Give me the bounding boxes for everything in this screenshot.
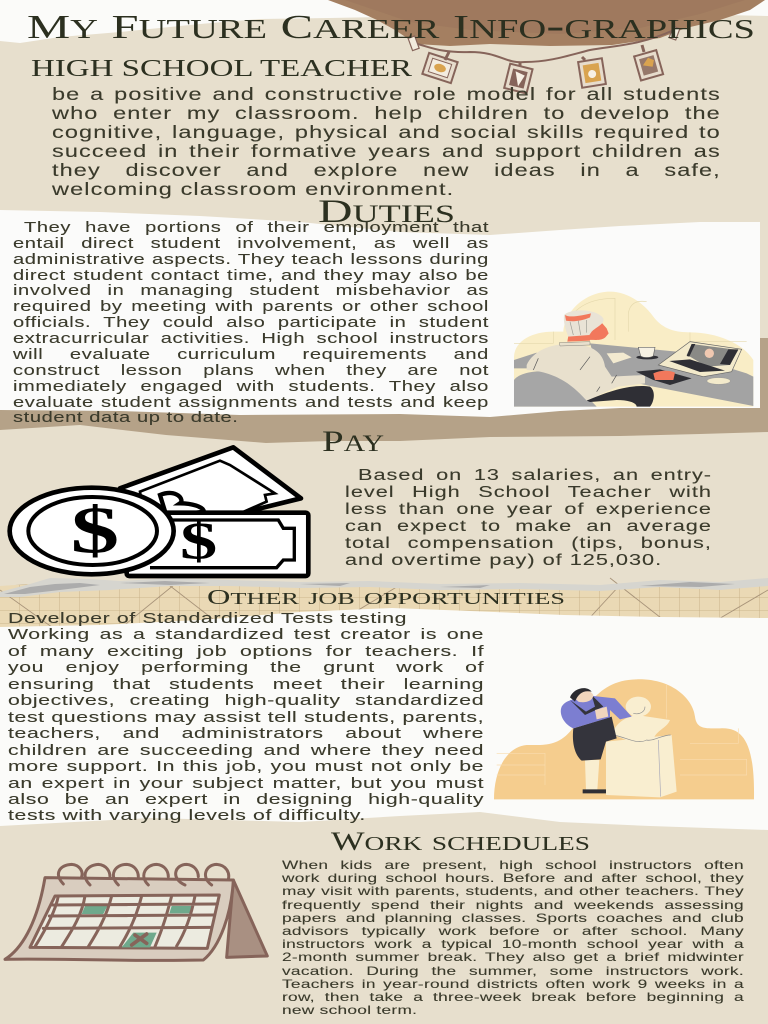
text block: pay: and overtime pay) of 125,030. [345, 552, 662, 569]
text block: other job opportunities: also be an expert in designing high-quality [8, 792, 484, 808]
heading: job: HIGH SCHOOL TEACHER [31, 56, 412, 82]
text block: work schedules: may visit with parents, students, and other teachers. They [282, 884, 744, 898]
text block: other job opportunities: Working as a standardized test creator is one [8, 627, 484, 643]
torn tan paper strip: pay top [0, 338, 768, 443]
text block: role description: welcoming classroom environment. [52, 179, 454, 199]
text block: duties: construct lesson plans when they are not [13, 363, 489, 379]
text block: other job opportunities: you enjoy performing the grunt work of [8, 660, 484, 676]
text block: pay: level High School Teacher with [345, 484, 712, 501]
text block: pay: Based on 13 salaries, an entry- [358, 467, 712, 484]
grid paper band [0, 578, 768, 650]
text block: other job opportunities: ensuring that students meet their learning [8, 677, 484, 693]
heading: pay: Pay [322, 423, 385, 459]
title: M y Future C areer Info-graphics [27, 5, 755, 47]
text block: work schedules: papers and planning classes. Sports coaches and club [282, 911, 744, 925]
text block: role description: cognitive, language, physical and social skills required to [52, 122, 721, 142]
text block: work schedules: frequently spend their nights and weekends assessing [282, 898, 744, 912]
icon: desk illustration [514, 292, 753, 407]
text block: work schedules [282, 858, 744, 1017]
text block: other job opportunities: teachers, and administrators about where [8, 726, 484, 742]
torn white paper: duties [0, 210, 760, 417]
text block: duties: evaluate student assignments and tests and keep [13, 395, 489, 411]
text block: work schedules: advisors typically work before or after school. Many [282, 924, 744, 938]
text block: other job opportunities: objectives, creating high-quality standardized [8, 693, 484, 709]
text block: duties: administrative aspects. They teach lessons during [13, 252, 489, 268]
text block: duties: involved in managing student misbehavior as [13, 283, 489, 299]
icon: money bills and coin: $ [180, 511, 217, 571]
heading: other job opportunities: O ther job opportunities [207, 584, 565, 610]
text block: duties [12, 220, 489, 426]
text block: role description: be a positive and constructive role model for all students [52, 84, 721, 104]
text block: work schedules: 2-month summer break. They also get a brief midwinter [282, 950, 744, 964]
text block: duties: entail direct student involvement, as well as [13, 236, 489, 252]
icon: money bills and coin [10, 447, 308, 576]
torn white paper: top [0, 0, 768, 43]
text block: pay: less than one year of experience [345, 501, 712, 518]
text block: other job opportunities: an expert in your subject matter, but you must [8, 776, 484, 792]
text block: duties: required by meeting with parents or other school [13, 299, 489, 315]
text block: other job opportunities [8, 611, 484, 824]
text block: duties: immediately engaged with students. They also [13, 379, 489, 395]
bunting with photos [408, 26, 680, 94]
torn white paper: other opportunities [0, 608, 768, 830]
text block: role description: succeed in their formative years and support children as [52, 141, 721, 161]
icon: money bills and coin: $ [71, 494, 119, 567]
icon: sculptor illustration [494, 679, 754, 799]
icon: desk calendar [5, 864, 267, 960]
text block: role description [52, 84, 721, 199]
text block: duties: They have portions of their employment that [24, 220, 489, 236]
heading: duties: D uties [318, 190, 455, 230]
text block: duties: student data up to date. [13, 410, 239, 426]
text block: duties: will evaluate curriculum requirements and [13, 347, 489, 363]
text block: work schedules: Teachers in year-round districts often work 9 weeks in a [282, 977, 744, 991]
text block: work schedules: When kids are present, high school instructors often [282, 858, 744, 872]
text block: other job opportunities: test questions may assist tell students, parents, [8, 710, 484, 726]
text block: pay [345, 467, 712, 569]
text block: other job opportunities: tests with varying levels of difficulty. [8, 808, 366, 824]
text block: duties: officials. They could also participate in student [13, 315, 489, 331]
text block: other job opportunities: more support. In this job, you must not only be [8, 759, 484, 775]
text block: duties: extracurricular activities. High school instructors [13, 331, 489, 347]
text block: work schedules: vacation. During the summer, some instructors work. [282, 964, 744, 978]
text block: work schedules: row, then take a three-week break before beginning a [282, 990, 744, 1004]
text block: pay: can expect to make an average [345, 518, 712, 535]
text block: role description: they discover and explore new ideas in a safe, [52, 160, 721, 180]
text block: other job opportunities: of many exciting job options for teachers. If [8, 644, 484, 660]
text block: other job opportunities: children are succeeding and where they need [8, 743, 484, 759]
text block: duties: direct student contact time, and they may also be [13, 268, 489, 284]
text block: work schedules: work during school hours. Before and after school, they [282, 871, 744, 885]
watercolor stain: top [328, 0, 765, 46]
text block: work schedules: new school term. [282, 1003, 417, 1017]
heading: work schedules: W ork schedules [331, 826, 590, 857]
text block: other job opportunities: Developer of Standardized Tests testing [8, 611, 407, 627]
text block: work schedules: instructors work a typical 10-month school year with a [282, 937, 744, 951]
text block: pay: total compensation (tips, bonus, [345, 535, 712, 552]
text block: role description: who enter my classroom. help children to develop the [52, 103, 721, 123]
